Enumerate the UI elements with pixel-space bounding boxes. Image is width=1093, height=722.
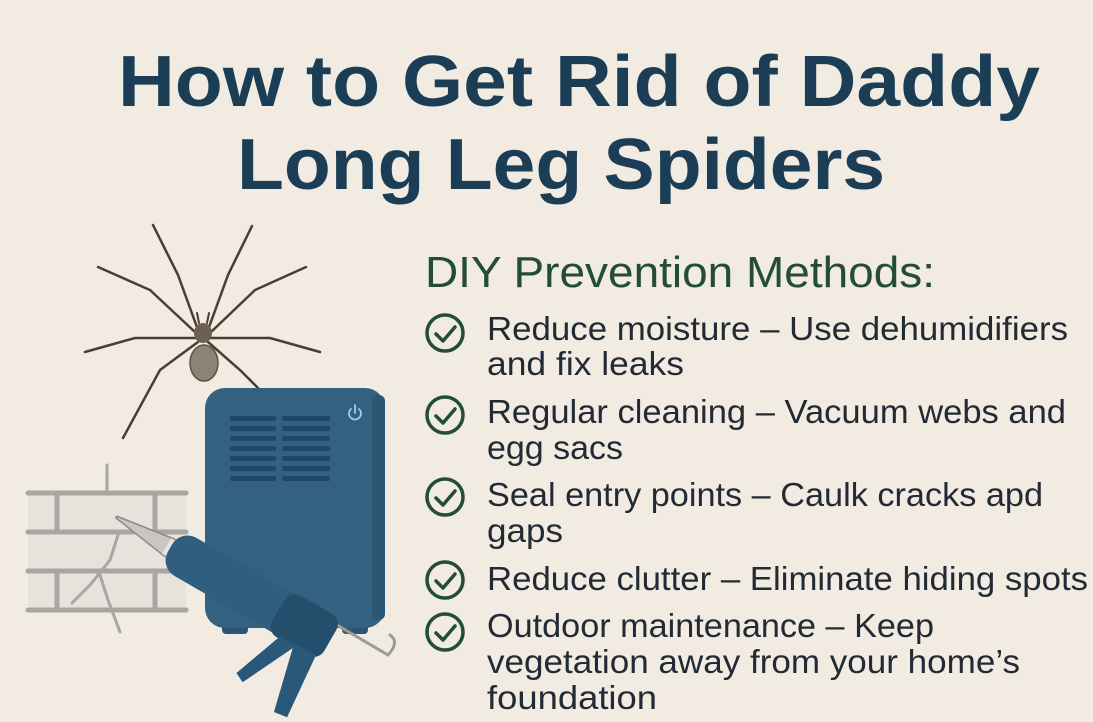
item: reduce moisture: Reduce moisture – Use dehumidifiers: [487, 310, 1068, 347]
item: outdoor maintenance: foundation: [487, 679, 657, 716]
icon: brick wall: [28, 465, 186, 632]
item: seal entry points: Seal entry points – Caulk cracks apd: [487, 476, 1043, 513]
subheading: DIY Prevention Methods:: [425, 248, 935, 297]
title: [118, 42, 1040, 205]
item: seal entry points: [427, 476, 1043, 549]
item: outdoor maintenance: Outdoor maintenance – Keep: [487, 607, 934, 644]
title: Long Leg Spiders: [237, 125, 885, 205]
item: outdoor maintenance: vegetation away from your home’s: [487, 643, 1020, 680]
item: regular cleaning: Regular cleaning – Vacuum webs and: [487, 393, 1066, 430]
item: reduce moisture: and fix leaks: [487, 345, 684, 382]
icon: dehumidifier: [205, 388, 385, 634]
item: reduce moisture: [427, 310, 1068, 382]
item: seal entry points: gaps: [487, 512, 563, 549]
icon: caulk gun: [71, 496, 395, 719]
item: regular cleaning: [427, 393, 1066, 466]
item: outdoor maintenance: [427, 607, 1020, 716]
item: regular cleaning: egg sacs: [487, 429, 623, 466]
item: reduce clutter: Reduce clutter – Eliminate hiding spots: [487, 560, 1088, 597]
icon: spider: [85, 225, 320, 438]
list of methods: [427, 310, 1088, 716]
title: How to Get Rid of Daddy: [118, 42, 1040, 122]
